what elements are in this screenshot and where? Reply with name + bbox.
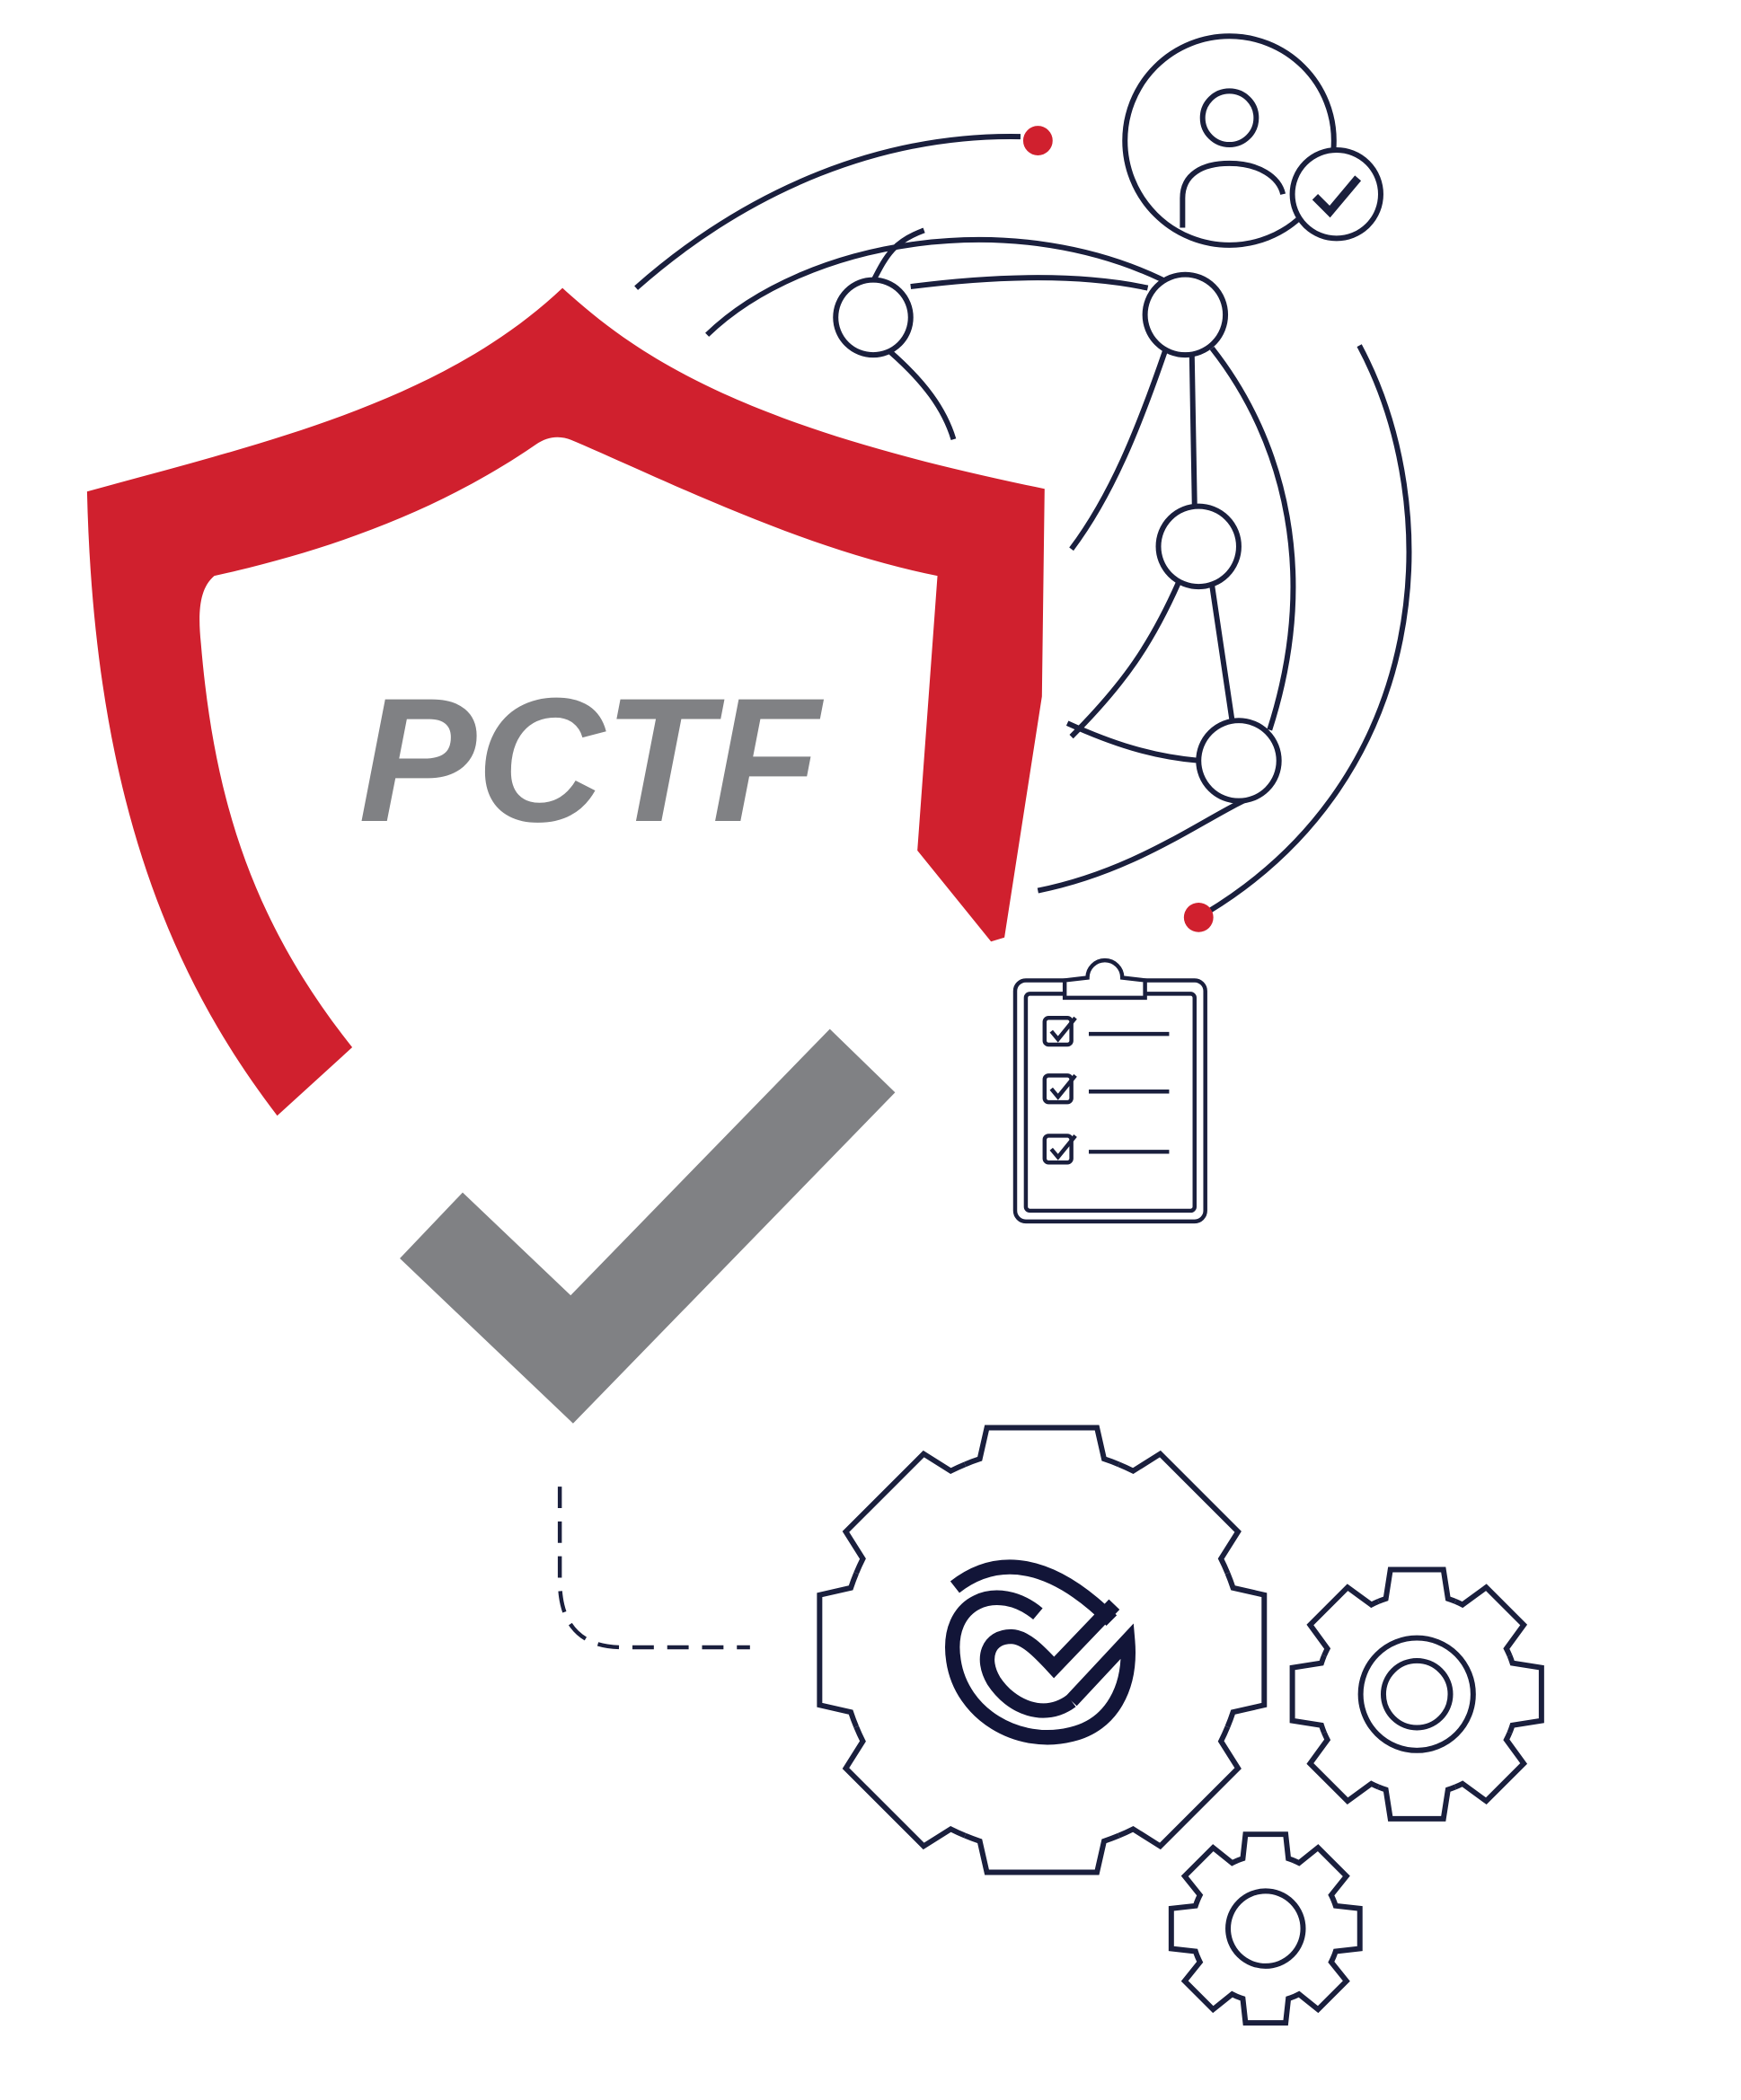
gear: bottom bbox=[1171, 1834, 1360, 2023]
shield bbox=[87, 288, 1045, 1116]
dashed connector bbox=[560, 1487, 750, 1647]
icon: user verified bbox=[1125, 36, 1381, 245]
gear: large with logo bbox=[819, 1427, 1264, 1873]
logo bbox=[952, 1567, 1128, 1737]
gear: right bbox=[1293, 1570, 1542, 1819]
title: PCTF: PCTF bbox=[358, 661, 825, 859]
network globe bbox=[636, 137, 1409, 913]
checkmark bbox=[431, 1061, 862, 1359]
icon: clipboard checklist bbox=[1015, 960, 1206, 1222]
red dots bbox=[1023, 126, 1214, 932]
